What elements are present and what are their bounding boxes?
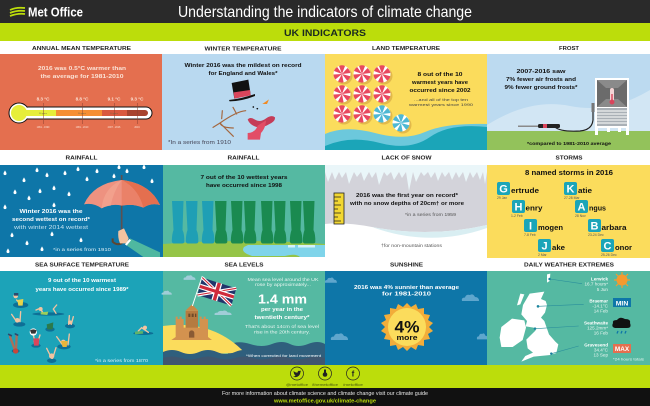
panel: storms: G <box>499 184 508 196</box>
panel: sea surface temperature: *in a series from 1870 <box>95 358 148 364</box>
weather stations text: 16.7 hours* <box>584 282 608 286</box>
heading row 1: ANNUAL MEAN TEMPERATURE <box>32 46 132 52</box>
panel: sea levels: twentieth century* <box>254 315 310 321</box>
puddle <box>243 245 325 257</box>
heading row 1: LAND TEMPERATURE <box>372 46 441 52</box>
panel: winter temperature: Winter 2016 was the mildest on record <box>184 63 302 69</box>
panel: land temperature: warmest years have <box>411 80 468 86</box>
panel: land temperature: warmest years since 1990 <box>409 102 474 107</box>
heading row 2: LACK OF SNOW <box>382 156 432 162</box>
panel: annual mean temperature: 9.3 °C <box>131 96 144 102</box>
panel: annual mean temperature: 30 years <box>39 113 47 115</box>
section band: UK indicators <box>0 23 650 41</box>
social band: /metoffice <box>343 383 363 387</box>
panel: annual mean temperature: 2016 was 0.5°C warmer than <box>38 66 127 72</box>
panel: sea levels: *When corrected for land movement <box>246 353 322 358</box>
icon: wellington boots <box>172 201 315 244</box>
panel: storms: 7-8 Feb <box>524 233 536 237</box>
panel: rainfall umbrella: Winter 2016 was the <box>20 209 82 215</box>
flag <box>192 276 236 306</box>
panel: storms: K <box>567 184 575 196</box>
carrot and eyes <box>252 99 269 109</box>
panel: winter temperature <box>162 54 325 150</box>
sea: front waves <box>163 350 325 365</box>
icon: facebook: f <box>352 370 355 378</box>
heading row 3: DAILY WEATHER EXTREMES <box>524 262 615 268</box>
weather stations text: 13 Sep <box>593 352 608 358</box>
panel: land temperature <box>325 54 487 150</box>
weather stations text: Lerwick <box>591 276 608 282</box>
heading row 3: SUNSHINE <box>390 262 424 268</box>
heading row 3: SEA LEVELS <box>224 262 264 268</box>
section band: UK indicators: UK INDICATORS <box>284 28 366 38</box>
panel: storms: 1-2 Feb <box>511 214 523 218</box>
weather stations text: 14 Feb <box>594 308 608 314</box>
heading row 2: RAINFALL <box>66 156 99 162</box>
icon: MIN badge <box>613 298 631 308</box>
footer: www.metoffice.gov.uk/climate-change <box>273 398 377 404</box>
icon: parasols <box>334 65 412 134</box>
panel: sea levels: per year in the <box>261 307 303 313</box>
stick arms <box>213 107 246 136</box>
panel: frost: 7% fewer air frosts and <box>506 77 577 83</box>
heading row 2 <box>66 156 583 162</box>
panel: storms: arbara <box>602 223 627 232</box>
icon: MIN badge: MIN <box>616 300 628 308</box>
panel: sea levels: Mean sea level around the UK <box>248 277 320 282</box>
panel: sunshine: 2016 was 4% sunnier than average <box>354 285 460 291</box>
panel: lack of snow: 2016 was the first year on record* <box>356 193 459 199</box>
icon: rain cloud <box>612 318 631 334</box>
panel: frost: 2007-2016 saw <box>516 69 566 75</box>
weather stations text <box>584 276 609 358</box>
panel: sea levels: rose by approximately... <box>255 282 311 287</box>
panel: storms: A <box>578 202 586 214</box>
panel: sea levels: rise in the 20th century. <box>254 330 310 334</box>
panel: frost: *compared to 1981-2010 average <box>527 141 612 146</box>
panel: land temperature: occurred since 2002 <box>410 88 470 94</box>
icon: sun <box>381 303 433 351</box>
title: Understanding the indicators of climate change <box>178 4 472 21</box>
icon: ground thermometer and cable <box>518 103 594 131</box>
panel: annual mean temperature: 8.8 °C <box>76 96 89 102</box>
sandcastle <box>171 304 212 340</box>
panel: annual mean temperature: 1981 - 2010 <box>76 126 89 129</box>
icicles <box>325 165 487 191</box>
sea: right swell <box>228 342 325 365</box>
clouds <box>325 277 488 340</box>
panel: rainfall umbrella: second wettest on record* <box>12 217 91 223</box>
storm tiles <box>497 182 614 252</box>
header bar <box>0 0 650 23</box>
panel: land temperature: 8 out of the 10 <box>418 72 462 78</box>
heading row 2: STORMS <box>556 156 583 162</box>
icon: facebook <box>346 367 360 380</box>
weather stations text: 125.2mm* <box>587 326 608 330</box>
heading row 2: RAINFALL <box>228 156 261 162</box>
panel: storms: 23-24 Dec <box>588 233 604 237</box>
social band: @metoffice <box>286 383 308 387</box>
panel: sunshine: 4% <box>394 318 420 336</box>
map: UK and Ireland <box>500 274 584 362</box>
panel: sea levels <box>162 271 325 365</box>
panel: winter temperature: *In a series from 1910 <box>168 140 231 146</box>
icon: swimmers <box>9 293 153 363</box>
icon: umbrella and hand <box>84 175 160 257</box>
panel: land temperature: ...and all of the top ten <box>414 97 468 102</box>
weather stations text: 34.4°C <box>594 348 609 352</box>
weather stations text: Braemar <box>589 298 608 304</box>
icon: twitter <box>290 367 304 380</box>
icon: snowman <box>213 80 275 140</box>
panel: storms: C <box>604 240 612 252</box>
panel: storms: atie <box>578 186 592 195</box>
icon: MAX badge <box>613 344 631 353</box>
panel: storms: mogen <box>538 223 563 232</box>
weather stations text: Seathwaite <box>584 320 608 326</box>
heading row 3: SEA SURFACE TEMPERATURE <box>35 262 130 268</box>
scarf <box>248 116 275 140</box>
panel: annual mean temperature: 2007 - 2016 <box>108 126 121 129</box>
panel: frost <box>487 54 650 150</box>
weather stations text: 16 Feb <box>594 330 608 336</box>
panel: lack of snow: *in a series from 1959 <box>405 212 457 217</box>
panel: storms: onor <box>615 243 632 252</box>
panel: storms <box>487 165 650 258</box>
panel: storms: I <box>529 220 532 232</box>
panel: sunshine: for 1981-2010 <box>382 292 431 298</box>
panel: rainfall umbrella: with winter 2014 wettest <box>13 225 89 231</box>
panel: daily weather extremes <box>487 271 650 365</box>
panel: storms: ertrude <box>511 186 539 195</box>
panel: daily weather extremes: *24 hours totals <box>613 358 644 362</box>
panel: storms: H <box>515 202 523 214</box>
panel: annual mean temperature: 30 years <box>78 113 86 115</box>
panel: lack of snow <box>325 165 487 257</box>
thermometer <box>9 103 152 124</box>
clouds <box>162 275 232 315</box>
panel: annual mean temperature: 9.1 °C <box>108 96 121 102</box>
panel: annual mean temperature: 10 years <box>110 113 118 115</box>
panel: frost: 9% fewer ground frosts* <box>504 85 578 91</box>
panel: annual mean temperature <box>0 54 162 150</box>
panel: storms: 28 Nov <box>575 214 586 218</box>
island <box>163 325 245 356</box>
illustration: island, castle, flag <box>162 275 245 356</box>
panel: rainfall wellies: have occurred since 1998 <box>206 183 282 189</box>
panel: sea surface temperature: 9 out of the 10 warmest <box>48 278 116 284</box>
panel: lack of snow: †for non-mountain stations <box>381 243 443 248</box>
panel: sea levels: 1.4 mm <box>258 292 307 306</box>
icon: MAX badge: MAX <box>615 346 630 353</box>
panel: sunshine <box>325 271 488 365</box>
icon: Met Office logo <box>10 8 25 16</box>
panel: storms: 27-28 Mar <box>564 196 580 200</box>
panel: winter temperature: for England and Wales* <box>208 71 278 77</box>
panel: annual mean temperature: the average for 1981-2010 <box>40 74 123 80</box>
weather stations text: Gravesend <box>584 342 608 348</box>
footer <box>0 388 650 406</box>
location leader lines and dots <box>534 278 584 355</box>
heading row 1 <box>32 46 580 52</box>
icon: weather screen <box>595 78 629 135</box>
weather stations text: 5 Jun <box>597 287 608 292</box>
panel: sea levels: That's about 14cm of sea level <box>245 324 319 329</box>
panel: sea surface temperature <box>0 271 163 365</box>
panel: lack of snow: with no snow depths of 20cm† or more <box>349 201 464 207</box>
panel: sunshine: more <box>396 335 418 342</box>
panel: sea surface temperature: years have occurred since 1989* <box>36 287 129 293</box>
panel: storms: ake <box>552 243 565 252</box>
panel: annual mean temperature: 2016 <box>134 126 140 129</box>
panel: storms: 29 Jan <box>497 196 507 200</box>
panel: storms: ngus <box>589 204 606 212</box>
panel: annual mean temperature: 1961 - 1990 <box>37 126 50 129</box>
heading row 1: FROST <box>559 46 580 52</box>
icon: sun <box>614 272 630 288</box>
panel: rainfall umbrella <box>0 164 163 257</box>
panel: rainfall wellies <box>163 165 325 257</box>
panel: rainfall wellies: 7 out of the 10 wettest years <box>200 175 288 181</box>
weather stations text: -14.1°C <box>592 304 609 308</box>
panel: annual mean temperature: 8.3 °C <box>37 96 50 102</box>
panel: storms: 25-26 Dec <box>601 253 617 257</box>
panel: storms: 2 Mar <box>538 253 548 257</box>
footer: For more information about climate science and climate change visit our climate guide <box>222 391 428 397</box>
hat <box>229 80 255 101</box>
icon: snow ruler <box>334 193 344 224</box>
heading row 1: WINTER TEMPERATURE <box>204 46 282 52</box>
panel: rainfall umbrella: *in a series from 1910 <box>53 247 111 253</box>
Met Office wordmark: Met Office <box>28 6 83 20</box>
panel: storms: enry <box>526 204 543 212</box>
heading row 3 <box>35 262 615 268</box>
panel: storms: 8 named storms in 2016 <box>525 170 613 177</box>
waves <box>325 124 487 150</box>
panel: storms: B <box>591 220 599 232</box>
icon: flickr / tumblr style <box>318 367 332 380</box>
social band <box>0 365 650 388</box>
social band: /themetoffice <box>312 383 338 387</box>
panel: storms: J <box>541 240 548 252</box>
rain drops <box>4 164 154 253</box>
